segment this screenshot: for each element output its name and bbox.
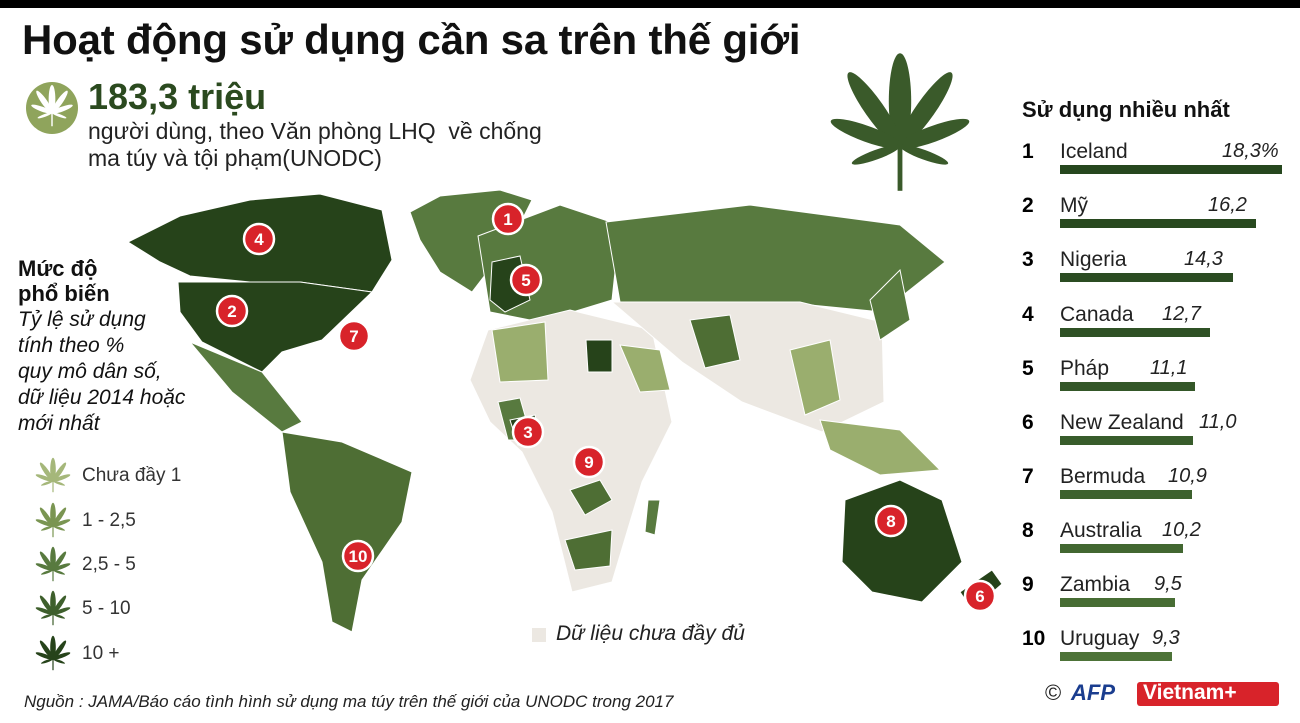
ranking list: Zambia: [1060, 573, 1130, 596]
ranking list: 9: [1022, 573, 1034, 596]
ranking list: New Zealand: [1060, 411, 1184, 434]
legend items: 2,5 - 5: [82, 554, 136, 575]
ranking list: Iceland: [1060, 140, 1128, 163]
legend heading: [18, 256, 186, 435]
legend heading: Tỷ lệ sử dụng: [18, 308, 146, 331]
source: Nguồn : JAMA/Báo cáo tình hình sử dụng ma túy trên thế giới của UNODC trong 2017: [24, 692, 673, 711]
map markers: 3: [523, 423, 533, 442]
ranking list: 10,9: [1168, 465, 1207, 487]
no data legend: Dữ liệu chưa đầy đủ: [556, 622, 745, 645]
map markers: 8: [886, 512, 896, 531]
legend heading: Mức độ: [18, 256, 97, 281]
ranking heading: Sử dụng nhiều nhất: [1022, 97, 1230, 122]
map markers: 6: [975, 587, 985, 606]
logo: AFP Vietnam: ©: [1045, 680, 1061, 705]
ranking list: 18,3%: [1222, 140, 1279, 162]
stat text: ma túy và tội phạm(UNODC): [88, 145, 382, 171]
ranking list: 11,1: [1150, 357, 1187, 379]
legend items: Chưa đầy 1: [82, 465, 181, 486]
title: Hoạt động sử dụng cần sa trên thế giới: [22, 16, 800, 63]
map markers: 2: [227, 302, 237, 321]
legend heading: dữ liệu 2014 hoặc: [18, 386, 185, 409]
legend heading: phổ biến: [18, 281, 110, 306]
icon: big leaf: [830, 53, 970, 191]
ranking list: Bermuda: [1060, 465, 1145, 488]
map markers: 10: [349, 547, 367, 566]
stat text: [88, 118, 542, 171]
legend heading: tính theo %: [18, 334, 124, 357]
stat number: 183,3 triệu: [88, 76, 266, 117]
ranking list: 11,0: [1199, 411, 1236, 433]
ranking list: Pháp: [1060, 357, 1109, 380]
stat text: người dùng, theo Văn phòng LHQ về chống: [88, 118, 542, 144]
ranking list: 16,2: [1208, 194, 1247, 216]
logo: AFP Vietnam: AFP: [1071, 680, 1115, 705]
top bar: [0, 0, 1300, 8]
icon: leaf circle: [26, 82, 78, 134]
map markers: 1: [503, 210, 513, 229]
ranking list: 6: [1022, 411, 1034, 434]
map markers: 7: [349, 327, 359, 346]
ranking list: 10,2: [1162, 519, 1201, 541]
legend items: [36, 458, 181, 670]
logo: AFP Vietnam: [1045, 680, 1279, 706]
ranking list: 1: [1022, 140, 1034, 163]
ranking list: 9,3: [1152, 627, 1180, 649]
map markers: 4: [254, 230, 264, 249]
legend items: 10 +: [82, 643, 120, 664]
ranking list: 8: [1022, 519, 1034, 542]
ranking list: 10: [1022, 627, 1045, 650]
ranking list: Nigeria: [1060, 248, 1127, 271]
ranking list: Mỹ: [1060, 194, 1088, 217]
ranking list: [1022, 140, 1282, 661]
ranking list: 4: [1022, 303, 1034, 326]
ranking list: Canada: [1060, 303, 1134, 326]
ranking list: 7: [1022, 465, 1034, 488]
ranking list: 5: [1022, 357, 1034, 380]
ranking list: Uruguay: [1060, 627, 1139, 650]
legend heading: mới nhất: [18, 412, 100, 435]
ranking list: 3: [1022, 248, 1034, 271]
map markers: 5: [521, 271, 531, 290]
legend heading: quy mô dân số,: [18, 360, 162, 383]
ranking list: 14,3: [1184, 248, 1223, 270]
ranking list: 9,5: [1154, 573, 1182, 595]
map markers: 9: [584, 453, 594, 472]
ranking list: Australia: [1060, 519, 1142, 542]
stat block: [26, 76, 542, 171]
logo: AFP Vietnam: Vietnam+: [1143, 681, 1237, 704]
ranking list: 2: [1022, 194, 1034, 217]
ranking list: 12,7: [1162, 303, 1201, 325]
legend items: 5 - 10: [82, 598, 131, 619]
legend items: 1 - 2,5: [82, 510, 136, 531]
